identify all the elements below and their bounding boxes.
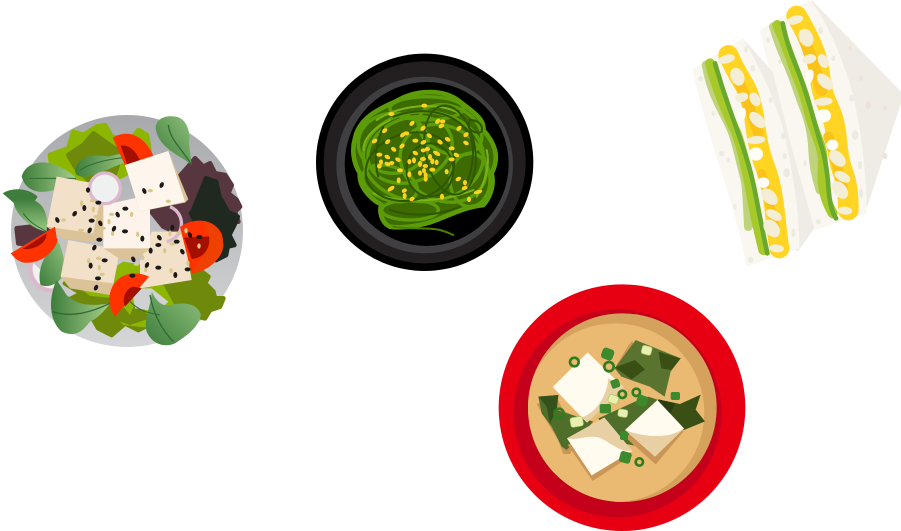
- onion ring top: [90, 173, 120, 204]
- green onions: [554, 345, 680, 466]
- tomato bottom: [109, 273, 149, 317]
- tomato right: [180, 221, 223, 274]
- back sandwich egg filling: [797, 16, 848, 210]
- sesame seeds: [54, 181, 202, 291]
- onion ring right: [167, 207, 181, 242]
- front sandwich lettuce: [706, 63, 767, 253]
- seaweed salad in black bowl: [316, 54, 533, 271]
- back sandwich: [760, 0, 901, 230]
- front sandwich bread: [692, 38, 799, 266]
- front sandwich egg white chunks: [717, 53, 784, 253]
- black bowl: [316, 54, 533, 271]
- egg salad sandwiches: [692, 0, 901, 266]
- lettuce: green: [50, 125, 223, 335]
- salad plate with tofu: [3, 115, 243, 347]
- front sandwich crust shadow: [743, 38, 814, 252]
- tofu pieces: [553, 352, 684, 481]
- back sandwich bread: [760, 0, 867, 230]
- front sandwich: [692, 38, 814, 266]
- red bowl: [499, 284, 745, 531]
- seaweed strands: [353, 92, 501, 235]
- front sandwich egg filling: [728, 55, 779, 248]
- onion ring lower left: [30, 262, 62, 291]
- miso soup in red bowl: [499, 284, 745, 531]
- tomato top: [113, 134, 153, 165]
- wakame seaweed pieces: [537, 340, 705, 454]
- back sandwich bread holes: [766, 27, 887, 224]
- soup: [526, 313, 717, 502]
- sesame seeds: [371, 104, 483, 202]
- back sandwich crust shadow: [812, 0, 901, 220]
- front sandwich bread holes: [698, 46, 795, 263]
- plate: [11, 115, 243, 347]
- tomato left: [11, 227, 57, 263]
- back sandwich egg white chunks: [786, 14, 853, 215]
- leaves: [3, 116, 201, 345]
- tofu cubes: [47, 151, 192, 295]
- lettuce: dark purple and dark green: [17, 158, 240, 260]
- back sandwich lettuce: [773, 23, 836, 218]
